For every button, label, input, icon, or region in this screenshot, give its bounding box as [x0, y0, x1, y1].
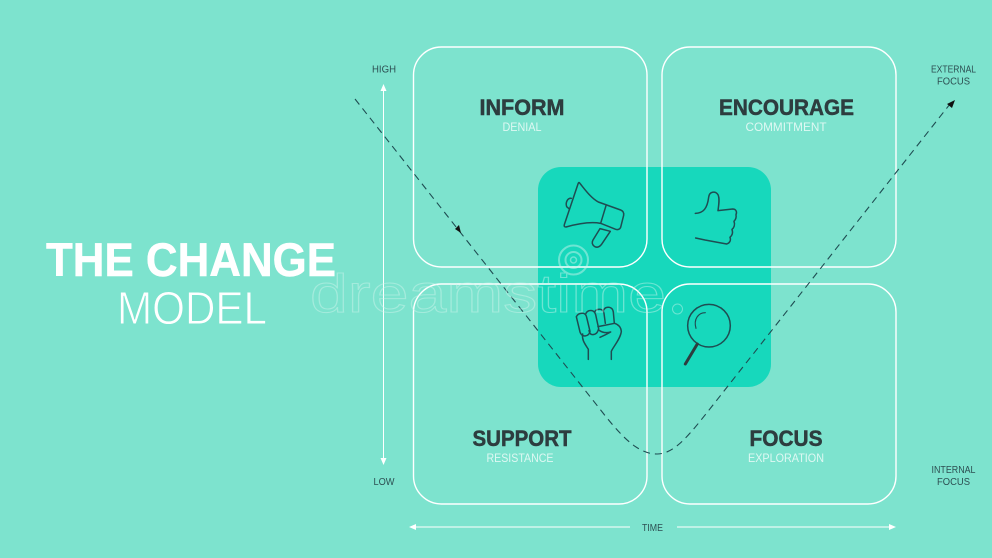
- panel: inform: INFORM: [480, 95, 564, 120]
- panel: support: SUPPORT: [472, 426, 572, 451]
- dashed change curve with arrows: [355, 99, 955, 454]
- panel: focus: EXPLORATION: [748, 451, 824, 465]
- panel: support: [414, 284, 647, 504]
- panel: inform: DENIAL: [502, 120, 542, 134]
- label: external focus: FOCUS: [937, 76, 970, 88]
- axis label: low: LOW: [374, 477, 395, 488]
- panel: support: RESISTANCE: [486, 451, 554, 465]
- watermark: [310, 246, 682, 324]
- panel: focus: [662, 284, 896, 504]
- axis label: time: TIME: [642, 523, 663, 534]
- icon: magnifying glass: [685, 304, 730, 364]
- center highlight panel: [538, 167, 771, 387]
- panel: encourage: ENCOURAGE: [719, 95, 854, 120]
- panel: encourage: COMMITMENT: [746, 120, 827, 134]
- icon: time horizontal arrow: [409, 524, 896, 530]
- label: internal focus: [932, 465, 976, 488]
- watermark: dreamstime: [310, 264, 666, 324]
- icon: thumbs up: [695, 192, 736, 244]
- label: external focus: [931, 64, 976, 88]
- label: internal focus: FOCUS: [937, 477, 970, 488]
- icon: megaphone: [564, 182, 624, 247]
- icon: raised fist: [576, 307, 621, 359]
- label: internal focus: INTERNAL: [932, 465, 976, 476]
- panel: focus: FOCUS: [750, 426, 822, 451]
- label: external focus: EXTERNAL: [931, 64, 976, 76]
- title: [46, 233, 336, 334]
- axis label: high: HIGH: [372, 64, 396, 76]
- panel: inform: [414, 47, 647, 267]
- title: MODEL: [117, 282, 267, 334]
- icon: low-to-high vertical arrow: [380, 84, 386, 465]
- panel: encourage: [662, 47, 896, 267]
- title: THE CHANGE: [46, 233, 336, 286]
